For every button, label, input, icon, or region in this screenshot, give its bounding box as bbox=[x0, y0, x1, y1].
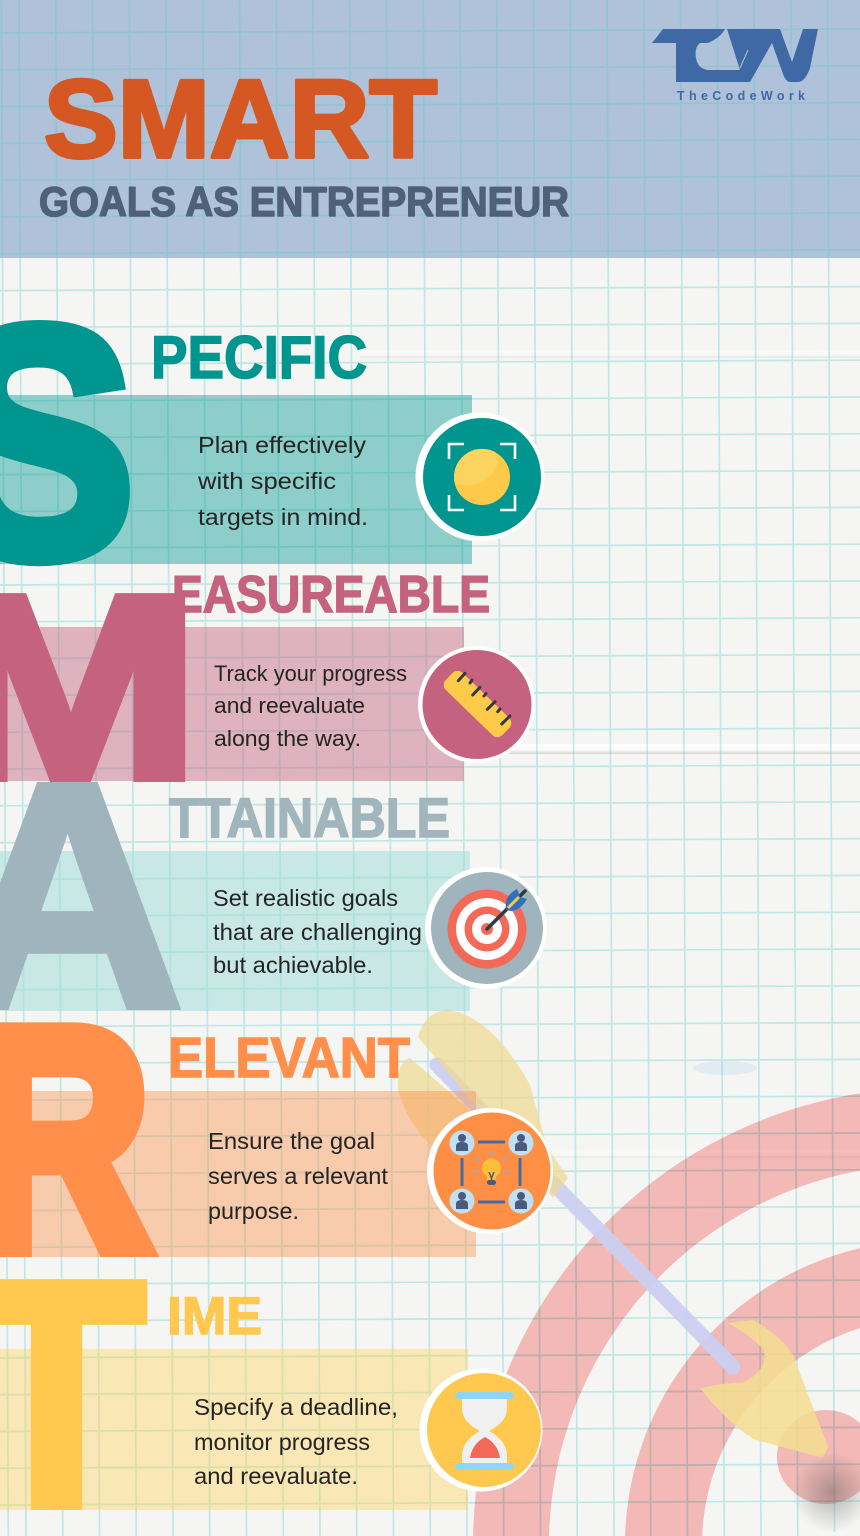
body text bbox=[194, 1394, 398, 1489]
logo wordmark: TheCodeWork bbox=[677, 89, 805, 103]
icon: team idea bbox=[427, 1108, 553, 1234]
body text: Set realistic goals bbox=[213, 885, 398, 911]
body text: Ensure the goal bbox=[208, 1128, 375, 1154]
arrow head bbox=[700, 1320, 828, 1458]
body text: Plan effectively bbox=[198, 432, 367, 458]
body text: monitor progress bbox=[194, 1429, 370, 1455]
subtitle: GOALS AS ENTREPRENEUR bbox=[39, 178, 569, 225]
logo: TheCodeWork bbox=[652, 29, 818, 103]
arrow shaft bbox=[437, 1065, 733, 1367]
background arrow bbox=[398, 1010, 828, 1458]
heading: IME bbox=[167, 1287, 262, 1346]
band bbox=[0, 627, 464, 781]
heading: PECIFIC bbox=[151, 324, 367, 391]
body text bbox=[213, 885, 422, 978]
paper creases bbox=[360, 350, 860, 1158]
arrow fletching bbox=[418, 1010, 568, 1198]
body text: and reevaluate bbox=[214, 693, 365, 718]
body text bbox=[214, 661, 407, 751]
panel: relevant bbox=[0, 966, 476, 1314]
body text: serves a relevant bbox=[208, 1163, 389, 1189]
body text: Specify a deadline, bbox=[194, 1394, 398, 1420]
heading: ELEVANT bbox=[168, 1026, 410, 1090]
icon: hourglass bbox=[420, 1368, 542, 1492]
body text: purpose. bbox=[208, 1198, 299, 1224]
panel: attainable bbox=[0, 716, 470, 1074]
band bbox=[0, 395, 472, 564]
body text: with specific bbox=[197, 468, 336, 494]
title block bbox=[39, 58, 569, 225]
title: SMART: SMART bbox=[44, 58, 437, 181]
panel: measureable bbox=[0, 543, 490, 833]
header band bbox=[0, 0, 860, 258]
body text: Track your progress bbox=[214, 661, 407, 686]
logo mark bbox=[652, 29, 818, 82]
band bbox=[0, 1091, 476, 1257]
background target bbox=[473, 1093, 860, 1536]
body text bbox=[197, 432, 368, 530]
panel: time bbox=[0, 1215, 468, 1536]
icon: focus sun bbox=[416, 412, 544, 542]
body text: but achievable. bbox=[213, 952, 373, 978]
body text: and reevaluate. bbox=[194, 1463, 358, 1489]
band bbox=[0, 851, 470, 1011]
heading: TTAINABLE bbox=[169, 786, 450, 849]
body text: along the way. bbox=[214, 726, 361, 751]
icon: dartboard bbox=[425, 867, 547, 989]
band bbox=[0, 1349, 468, 1510]
body text: targets in mind. bbox=[198, 504, 368, 530]
heading: EASUREABLE bbox=[172, 566, 490, 624]
paper shadow bbox=[792, 1452, 860, 1534]
icon: ruler bbox=[418, 646, 535, 763]
panel: specific bbox=[0, 259, 472, 626]
body text: that are challenging bbox=[213, 919, 422, 945]
body text bbox=[208, 1128, 389, 1224]
